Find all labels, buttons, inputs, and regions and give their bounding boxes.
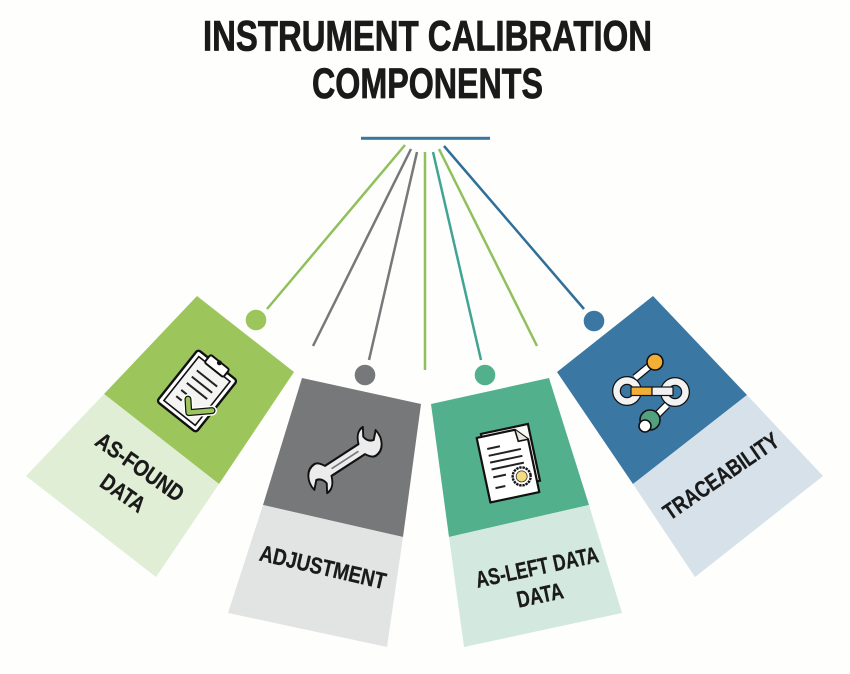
- dot: as-left: [475, 365, 495, 385]
- label: as-found: AS-FOUND: [91, 427, 189, 507]
- title: INSTRUMENT CALIBRATION: [203, 12, 652, 60]
- panel: adjustment: [228, 378, 421, 647]
- header block: [104, 296, 294, 484]
- icon: wrench: [300, 422, 390, 498]
- top bar: [361, 137, 490, 140]
- panel: as-found data: [26, 296, 294, 577]
- header block: [263, 378, 421, 537]
- panel: traceability: [557, 296, 823, 577]
- title: COMPONENTS: [312, 60, 543, 108]
- dot: traceability: [584, 311, 604, 331]
- label: as-left data: DATA: [514, 577, 566, 613]
- line: as-left: [433, 152, 481, 360]
- icon: certificate document: [476, 424, 542, 502]
- panel: as-left data: [431, 378, 622, 647]
- label block: [26, 394, 219, 577]
- line: traceability: [444, 146, 584, 309]
- line: adjustment: [369, 152, 417, 360]
- icon: clipboard with check: [157, 345, 241, 432]
- line: green outer: [439, 149, 537, 346]
- label: as-left data: AS-LEFT DATA: [473, 541, 601, 593]
- label: adjustment: ADJUSTMENT: [257, 540, 389, 594]
- icon: traceability chain: [616, 354, 686, 432]
- label block: [228, 505, 403, 647]
- label: traceability: TRACEABILITY: [658, 427, 784, 525]
- line: as-found: [267, 145, 405, 309]
- label: as-left data: [473, 541, 601, 613]
- connector lines: [267, 145, 584, 370]
- line: gray outer: [313, 149, 411, 346]
- label block: [449, 505, 622, 647]
- label: as-found: DATA: [95, 468, 151, 518]
- header block: [431, 378, 589, 537]
- dot: adjustment: [355, 365, 375, 385]
- title: [203, 12, 652, 108]
- label block: [633, 395, 823, 577]
- dot: as-found: [246, 310, 266, 330]
- line: center green: [424, 152, 426, 370]
- header block: [557, 296, 747, 484]
